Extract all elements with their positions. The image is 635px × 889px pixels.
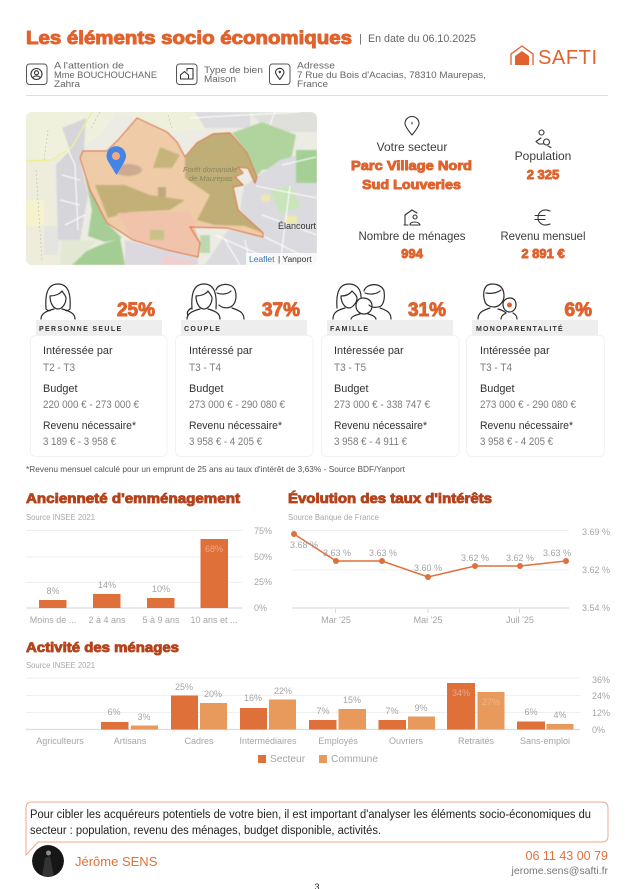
line chart: taux d'intérêts: 3.62 % <box>506 553 534 563</box>
stat: population: Population <box>515 149 571 163</box>
map: Forêt domaniale <box>183 165 237 174</box>
bar chart: activité des ménages: 3% <box>137 712 151 722</box>
icon: house <box>176 64 197 84</box>
bar chart: activité des ménages: Agriculteurs <box>36 736 84 746</box>
card: T2 - T3 <box>43 362 75 374</box>
stat: sector <box>351 117 472 192</box>
bar chart: ancienneté: 8% <box>46 586 60 596</box>
tab label <box>181 320 307 335</box>
stat: population: 2 325 <box>527 167 559 182</box>
bar chart: ancienneté: 50% <box>254 552 272 562</box>
card: 3 958 € - 4 911 € <box>334 436 407 448</box>
map attribution <box>246 253 317 265</box>
panel: famille <box>322 284 459 456</box>
line chart: taux d'intérêts: 3.63 % <box>323 548 351 558</box>
address: France <box>297 79 328 90</box>
line chart: taux d'intérêts: Juil '25 <box>506 615 534 625</box>
bar chart: activité des ménages: Employés <box>318 736 358 746</box>
legend: Secteur <box>270 754 306 765</box>
bar chart: activité des ménages: Sans-emploi <box>520 736 570 746</box>
tab label: MONOPARENTALITÉ <box>476 324 564 333</box>
legend <box>258 754 378 765</box>
avatar <box>32 845 64 877</box>
bar chart: activité des ménages: Cadres <box>184 736 214 746</box>
bar chart: activité des ménages <box>26 675 610 765</box>
icon: location <box>405 117 419 135</box>
line chart: taux d'intérêts: 3.62 % <box>461 553 489 563</box>
footnote: *Revenu mensuel calculé pour un emprunt de 25 ans au taux d'intérêt de 3,63% - Source BDF/Yanport <box>26 464 406 474</box>
card <box>30 336 167 456</box>
panel: couple <box>176 284 313 456</box>
card: Revenu nécessaire* <box>43 420 137 432</box>
title: | <box>359 33 362 45</box>
icon: couple <box>187 284 244 319</box>
tab label: COUPLE <box>184 326 221 333</box>
bar chart: activité des ménages: 20% <box>204 689 222 699</box>
bar chart: ancienneté: Moins de ... <box>30 615 76 625</box>
heading: activité <box>26 640 179 670</box>
icon: house person <box>404 210 420 225</box>
bar chart: activité des ménages: 34% <box>452 688 470 698</box>
heading: ancienneté <box>26 491 241 522</box>
bar chart: activité des ménages: 0% <box>592 725 605 735</box>
bar chart: ancienneté: 25% <box>254 577 272 587</box>
bar chart: ancienneté: 14% <box>98 580 116 590</box>
stat: households: 994 <box>401 246 424 261</box>
map attribution: Leaflet <box>249 254 275 264</box>
bar chart: activité des ménages: 9% <box>414 703 428 713</box>
sector polygon <box>80 118 263 257</box>
property type: Maison <box>204 74 236 85</box>
card: T3 - T5 <box>334 362 366 374</box>
bar chart: activité des ménages: 27% <box>482 697 500 707</box>
card: Budget <box>43 383 78 395</box>
heading: taux: Source Banque de France <box>288 513 380 522</box>
bar chart: activité des ménages: 25% <box>175 682 193 692</box>
icon: woman <box>41 284 75 319</box>
heading: ancienneté: Source INSEE 2021 <box>26 513 96 522</box>
logo: SAFTI <box>511 46 597 69</box>
stat: households: Nombre de ménages <box>358 229 466 243</box>
bar chart: activité des ménages: 22% <box>274 686 292 696</box>
card: Budget <box>334 383 369 395</box>
heading: activité: Source INSEE 2021 <box>26 661 96 670</box>
bar chart: ancienneté: 0% <box>254 603 267 613</box>
heading: ancienneté: Ancienneté d'emménagement <box>26 491 241 506</box>
card <box>322 336 459 456</box>
recipient info: Zahra <box>54 79 81 90</box>
bar chart: ancienneté: 10 ans et ... <box>190 615 238 625</box>
recipient info: Mme BOUCHOUCHANE <box>54 70 157 81</box>
bar chart: activité des ménages: Intermédiaires <box>239 736 297 746</box>
property type <box>176 64 263 85</box>
line chart: taux d'intérêts: 3.63 % <box>543 548 571 558</box>
recipient info <box>26 60 157 90</box>
stat: sector: Votre secteur <box>377 140 447 154</box>
bar chart: ancienneté: 10% <box>152 584 170 594</box>
tab label <box>327 320 453 335</box>
stat: population <box>515 130 571 182</box>
line chart: taux d'intérêts: 3.69 % <box>582 527 610 537</box>
heading: activité: Activité des ménages <box>26 640 179 655</box>
bar chart: ancienneté: 75% <box>254 526 272 536</box>
percentage: 25% <box>117 300 155 321</box>
heading: taux: Évolution des taux d'intérêts <box>288 491 492 506</box>
bar chart: activité des ménages: 6% <box>524 707 538 717</box>
card: Revenu nécessaire* <box>480 420 574 432</box>
line chart: taux d'intérêts: 3.68 % <box>290 540 318 550</box>
card <box>176 336 313 456</box>
card: Intéressé par <box>189 345 253 357</box>
tab label <box>472 320 598 335</box>
card: 220 000 € - 273 000 € <box>43 399 139 411</box>
bar chart: activité des ménages: Artisans <box>114 736 147 746</box>
bar chart: activité des ménages: Retraités <box>458 736 495 746</box>
stat: income: Revenu mensuel <box>500 229 586 243</box>
card: T3 - T4 <box>189 362 221 374</box>
icon: person search <box>536 130 551 148</box>
card: Revenu nécessaire* <box>189 420 283 432</box>
map <box>26 112 317 265</box>
percentage: 6% <box>565 300 592 321</box>
bar chart: ancienneté: 68% <box>205 544 223 554</box>
panel: monoparentalité <box>466 284 604 456</box>
card: Budget <box>189 383 224 395</box>
bar chart: activité des ménages: 7% <box>316 706 330 716</box>
callout <box>26 802 608 855</box>
address: 7 Rue du Bois d'Acacias, 78310 Maurepas, <box>297 70 486 81</box>
icon: family <box>333 284 391 319</box>
agent name: Jérôme SENS <box>75 854 158 869</box>
icon: person <box>26 64 47 84</box>
logo: SAFTI: SAFTI <box>538 47 597 69</box>
map attribution: | Yanport <box>278 254 312 264</box>
callout: secteur : population, revenu des ménages, budget disponible, activités. <box>30 825 381 837</box>
line chart: taux d'intérêts: 3.63 % <box>369 548 397 558</box>
icon: euro <box>535 210 550 225</box>
legend: Commune <box>331 754 378 765</box>
card <box>466 336 604 456</box>
card: 273 000 € - 338 747 € <box>334 399 430 411</box>
map: de Maurepas <box>189 174 233 183</box>
panel: personne seule <box>30 284 167 456</box>
line chart: taux d'intérêts: 3.60 % <box>414 563 442 573</box>
bar chart: activité des ménages: 12% <box>592 708 610 718</box>
icon: pin <box>270 64 290 84</box>
icon: map pin <box>106 146 142 176</box>
bar chart: activité des ménages: 24% <box>592 691 610 701</box>
bar chart: activité des ménages: 36% <box>592 675 610 685</box>
stat: sector: Parc Village Nord <box>351 158 472 173</box>
title: En date du 06.10.2025 <box>368 33 476 45</box>
bar chart: ancienneté <box>26 526 272 625</box>
stat: income: 2 891 € <box>521 246 565 261</box>
percentage: 31% <box>408 300 446 321</box>
line chart: taux d'intérêts: Mai '25 <box>414 615 442 625</box>
agent contact: jerome.sens@safti.fr <box>511 865 608 877</box>
recipient info: A l'attention de <box>54 60 124 72</box>
callout: Pour cibler les acquéreurs potentiels de votre bien, il est important d'analyser les éléments socio-économiques du <box>30 809 591 821</box>
percentage: 37% <box>262 300 300 321</box>
tab label <box>36 320 162 335</box>
stat: income <box>500 210 586 261</box>
bar chart: ancienneté: 5 à 9 ans <box>142 615 180 625</box>
card: T3 - T4 <box>480 362 512 374</box>
property type: Type de bien <box>204 65 263 76</box>
bar chart: ancienneté: 2 à 4 ans <box>88 615 126 625</box>
card: Intéressée par <box>43 345 113 357</box>
bar chart: activité des ménages: 6% <box>107 707 121 717</box>
card: Revenu nécessaire* <box>334 420 428 432</box>
bar chart: activité des ménages: 7% <box>385 706 399 716</box>
icon: parent and child <box>478 284 517 319</box>
bar chart: activité des ménages: 4% <box>553 710 567 720</box>
card: Budget <box>480 383 515 395</box>
card: 3 958 € - 4 205 € <box>189 436 262 448</box>
card: 3 189 € - 3 958 € <box>43 436 116 448</box>
line chart: taux d'intérêts <box>290 527 610 625</box>
line chart: taux d'intérêts: 3.62 % <box>582 565 610 575</box>
title: Les éléments socio économiques <box>26 27 352 48</box>
tab label: FAMILLE <box>330 326 369 333</box>
card: Intéressée par <box>334 345 404 357</box>
bar chart: activité des ménages: 16% <box>244 693 262 703</box>
map: Élancourt <box>278 221 316 231</box>
title <box>26 27 476 48</box>
heading: taux <box>288 491 492 522</box>
card: 273 000 € - 290 080 € <box>189 399 285 411</box>
line chart: taux d'intérêts: Mar '25 <box>321 615 351 625</box>
agent contact <box>511 849 608 877</box>
bar chart: activité des ménages: Ouvriers <box>389 736 423 746</box>
line chart: taux d'intérêts: 3.54 % <box>582 603 610 613</box>
address <box>270 60 486 90</box>
stat: households <box>358 210 466 261</box>
bar chart: activité des ménages: 15% <box>343 695 361 705</box>
address: Adresse <box>297 60 335 72</box>
card: Intéressée par <box>480 345 550 357</box>
stat: sector: Sud Louveries <box>362 177 461 192</box>
card: 273 000 € - 290 080 € <box>480 399 576 411</box>
card: 3 958 € - 4 205 € <box>480 436 553 448</box>
agent contact: 06 11 43 00 79 <box>526 849 608 863</box>
tab label: PERSONNE SEULE <box>39 326 122 333</box>
